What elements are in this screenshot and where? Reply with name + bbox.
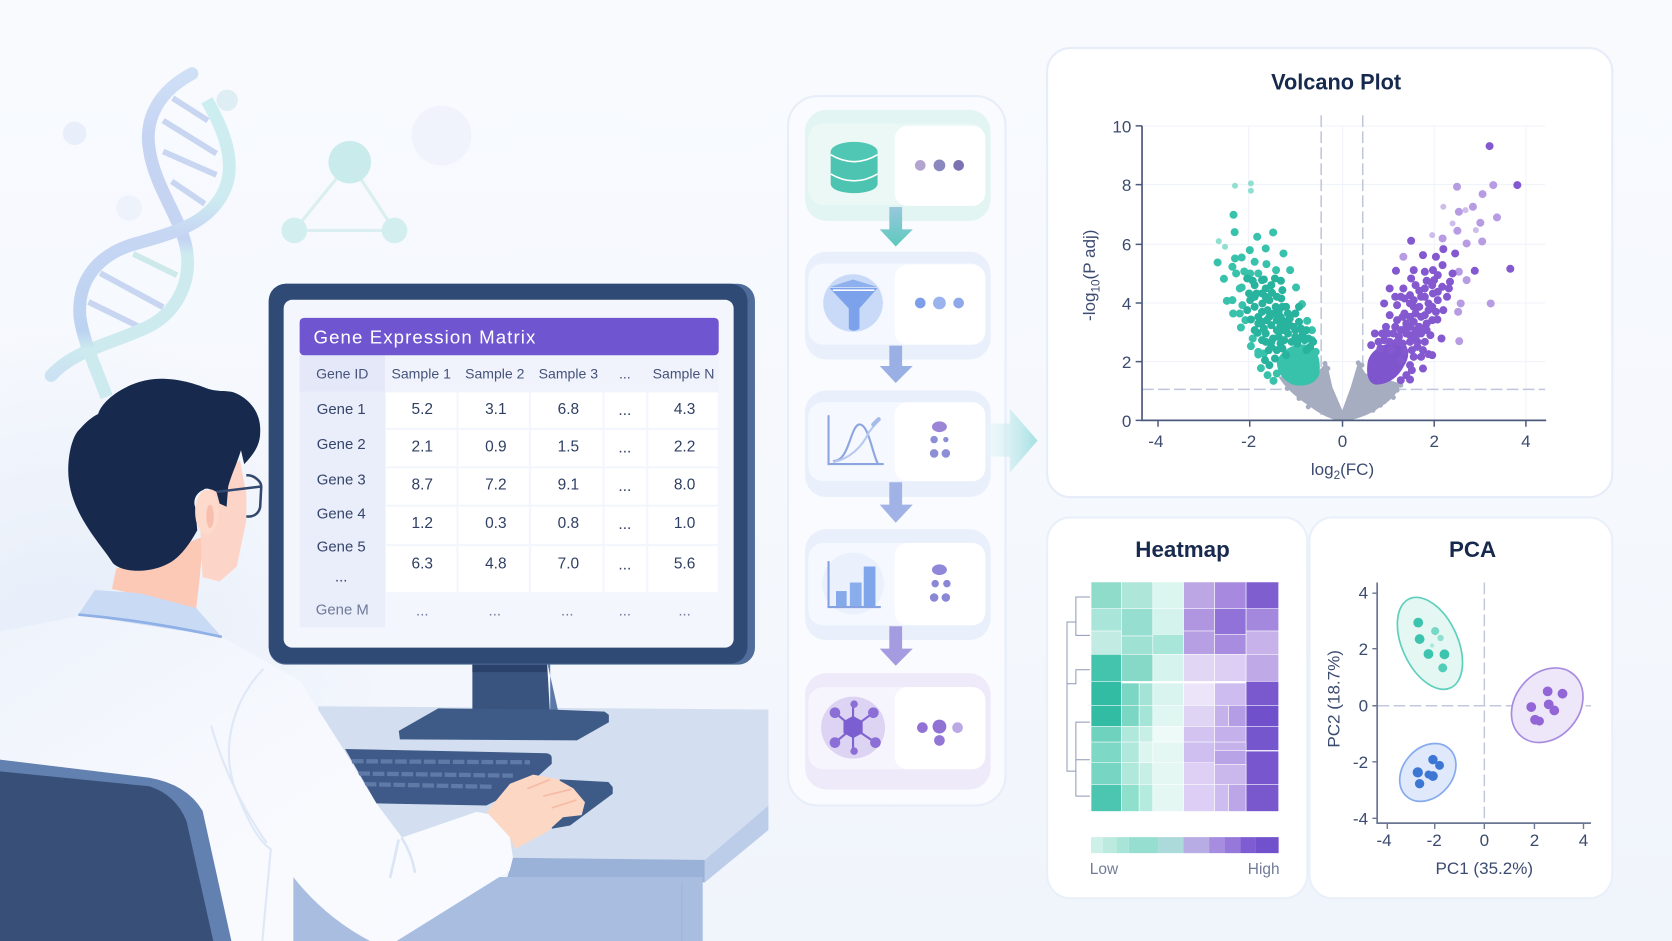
hand (487, 775, 585, 849)
table values (412, 401, 695, 620)
legend: colour scale (1090, 837, 1280, 878)
mouse (552, 779, 613, 829)
desk (293, 706, 768, 941)
table values: 9.1 (558, 477, 579, 494)
table values: ... (678, 603, 691, 620)
axes (1142, 126, 1546, 420)
y tick labels: 10 (1112, 117, 1131, 136)
row labels: Gene 4 (317, 506, 366, 523)
decorative background circles (63, 90, 471, 221)
chair (0, 760, 231, 941)
panel: workflow steps (788, 96, 1006, 806)
chart: volcano scatter (1080, 115, 1546, 482)
table values: ... (618, 516, 631, 533)
table values: 8.0 (674, 477, 695, 494)
cluster: purple (1497, 654, 1598, 757)
reference lines (1378, 583, 1591, 823)
table values: 5.2 (412, 401, 433, 418)
x axis label: PC1 (35.2%) (1436, 859, 1533, 878)
table values: 0.9 (485, 438, 507, 455)
chart: dendrogram (1067, 597, 1090, 796)
cluster: teal (1384, 587, 1476, 700)
table values: 7.2 (485, 477, 507, 494)
table values: 1.5 (558, 438, 579, 455)
y tick labels (1112, 117, 1131, 431)
y tick labels: 8 (1122, 176, 1131, 195)
column headers: Sample 2 (465, 366, 525, 382)
table values: 6.8 (558, 401, 579, 418)
arrow 3 (880, 482, 913, 523)
status dots (930, 421, 950, 458)
table values: 6.3 (412, 556, 433, 573)
threshold lines (1142, 115, 1545, 420)
row labels: Gene 2 (317, 436, 366, 453)
status dots (915, 160, 964, 171)
keyboard (345, 749, 552, 806)
grid lines (1142, 126, 1545, 420)
heading: volcano plot: Volcano Plot (1271, 70, 1401, 95)
table values: ... (618, 557, 631, 574)
heading: heatmap: Heatmap (1135, 537, 1230, 562)
column headers: Sample 3 (539, 366, 598, 382)
lab coat (0, 616, 513, 941)
table values: 2.2 (674, 438, 695, 455)
x tick labels (1377, 831, 1588, 850)
column headers: Sample 1 (391, 366, 451, 382)
icon: funnel (823, 274, 883, 332)
column headers: Gene ID (316, 366, 368, 382)
row labels: Gene 3 (317, 471, 366, 488)
table values: ... (618, 478, 631, 495)
status dots (917, 720, 963, 746)
step 3: normalization (805, 390, 991, 497)
icon: bar chart (822, 553, 884, 615)
x tick labels: 0 (1338, 432, 1347, 451)
upregulated points (1367, 146, 1517, 385)
table values: 0.3 (485, 515, 507, 532)
table values: 8.7 (412, 477, 433, 494)
y tick labels: 2 (1122, 353, 1131, 372)
legend: colour scale: High (1248, 861, 1280, 878)
x axis label: 2 (1334, 469, 1340, 482)
icon: database (831, 142, 878, 193)
y tick labels (1353, 584, 1368, 829)
step 5: network (805, 673, 991, 790)
icon: molecule network (282, 141, 407, 243)
y tick labels: 0 (1122, 412, 1131, 431)
row labels: Gene 5 (317, 539, 366, 556)
face (200, 460, 246, 581)
table values: ... (416, 603, 428, 620)
row labels: ... (335, 568, 347, 585)
column headers: ... (619, 366, 631, 382)
x tick labels (1148, 432, 1531, 451)
x tick labels: -4 (1377, 831, 1392, 850)
y tick labels: -2 (1353, 753, 1368, 772)
arrow: to results (986, 409, 1038, 473)
row labels: Gene M (316, 602, 369, 619)
table title bar: Gene Expression Matrix (314, 327, 536, 348)
x tick labels: 2 (1530, 831, 1539, 850)
table values: 4.8 (485, 556, 507, 573)
downregulated points (1218, 183, 1320, 386)
step 4: statistics (805, 529, 991, 640)
monitor stand (399, 661, 609, 740)
legend: colour scale: Low (1090, 861, 1119, 878)
x tick labels: 4 (1579, 831, 1588, 850)
row labels (316, 401, 369, 619)
x tick labels: -2 (1241, 432, 1256, 451)
table values: ... (618, 439, 631, 456)
chart: PCA scatter (1324, 583, 1598, 878)
table values: 5.6 (674, 556, 695, 573)
column headers (316, 366, 714, 382)
icon: curve chart (829, 416, 883, 464)
hair (68, 379, 260, 571)
status dots (930, 564, 951, 602)
table values: ... (619, 603, 631, 620)
x axis label: log (1311, 460, 1334, 479)
table values: 3.1 (485, 401, 507, 418)
y tick labels: 4 (1359, 584, 1368, 603)
x tick labels: 4 (1521, 432, 1531, 451)
y axis label: 10 (1089, 279, 1102, 293)
arrow 2 (880, 346, 913, 383)
x tick labels: -4 (1148, 432, 1163, 451)
table values: ... (489, 603, 501, 620)
column headers: Sample N (653, 366, 714, 382)
heading: PCA: PCA (1449, 537, 1496, 562)
not significant points (1279, 362, 1401, 421)
monitor (269, 284, 755, 665)
arrow 4 (880, 626, 913, 666)
y axis label: (P adj) (1080, 230, 1099, 279)
y tick labels: 4 (1122, 294, 1131, 313)
table values: 7.0 (558, 556, 579, 573)
y axis label: PC2 (18.7%) (1324, 650, 1343, 748)
row labels: Gene 1 (317, 401, 366, 418)
step 2: filter (805, 252, 991, 360)
table values: 1.2 (412, 515, 433, 532)
x axis label: (FC) (1340, 460, 1374, 479)
y axis label: -log (1080, 293, 1099, 321)
table values: ... (618, 402, 631, 419)
y tick labels: -4 (1353, 810, 1368, 829)
table: gene expression matrix (300, 318, 719, 627)
step 1: data (805, 110, 991, 221)
glasses (216, 475, 261, 517)
cluster: blue (1388, 732, 1467, 813)
ear (195, 490, 219, 535)
table values: 0.8 (558, 515, 579, 532)
icon: network hub (821, 697, 885, 759)
y tick labels: 0 (1359, 697, 1368, 716)
x tick labels: 0 (1480, 831, 1489, 850)
status dots (915, 297, 964, 309)
y tick labels: 2 (1359, 640, 1368, 659)
panel: volcano plot (1047, 48, 1612, 497)
panel: PCA (1309, 517, 1612, 898)
chart: heatmap cells (1091, 582, 1279, 811)
axes (1377, 583, 1591, 823)
x tick labels: 2 (1429, 432, 1439, 451)
scientist (0, 379, 585, 941)
arrow 1 (880, 207, 913, 246)
x tick labels: -2 (1427, 831, 1442, 850)
icon: DNA double helix (51, 74, 229, 397)
table values: 4.3 (674, 401, 695, 418)
y tick labels: 6 (1122, 236, 1131, 255)
panel: heatmap (1047, 517, 1307, 898)
table values: 2.1 (412, 438, 433, 455)
table values: 1.0 (674, 515, 695, 532)
neck (112, 537, 204, 608)
table values: ... (561, 603, 574, 620)
table title bar (300, 318, 719, 355)
collar (78, 590, 222, 637)
